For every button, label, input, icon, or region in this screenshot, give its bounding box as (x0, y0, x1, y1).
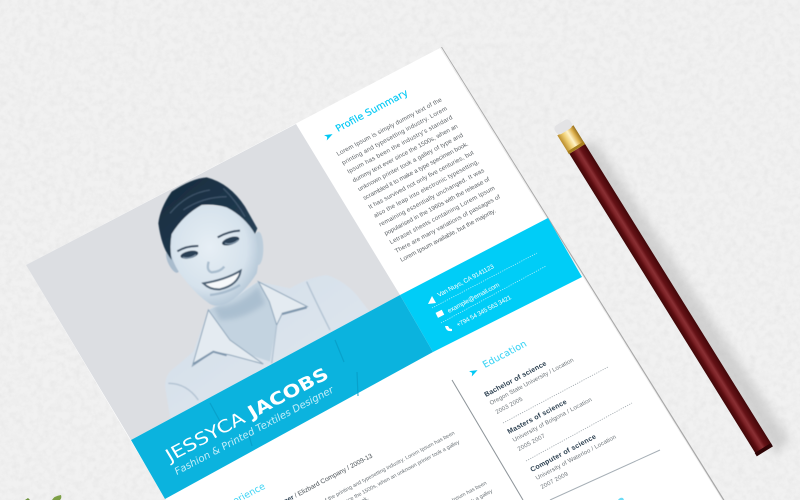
panel: contact details (428, 253, 546, 331)
panel: education (469, 339, 632, 491)
sheet edge shadow (441, 47, 724, 500)
degree 3: Computer of science (529, 434, 598, 474)
panel: profile summary (324, 88, 507, 264)
dotted separator (526, 403, 632, 461)
pencil (553, 118, 790, 456)
summary text: Letraset sheets containing Lorem Ipsum (388, 185, 496, 246)
summary text: remaining essentially unchanged. It was (378, 167, 486, 228)
degree 2: Masters of science (506, 399, 568, 436)
panel: experience (216, 431, 494, 500)
name and job title (161, 365, 337, 478)
degree 3: 2007 2009 (540, 471, 570, 491)
summary text: There are many variations of passages of (394, 194, 502, 255)
summary text: Lorem Ipsum available, but the majority. (399, 208, 498, 264)
divider lines (452, 380, 523, 500)
resume sheet (26, 47, 724, 500)
summary text: also the leap into electronic typesetting, (373, 158, 481, 220)
summary text: It has survived not only five centuries, but (367, 149, 475, 211)
phone: +794 54 345 563 3421 (455, 294, 513, 329)
summary text: scrambled it to make a type specimen book. (362, 141, 470, 202)
hair (158, 177, 257, 260)
address: Van Nuys, CA 9141123 (436, 263, 496, 299)
shirt (166, 276, 368, 418)
degree 1: 2003 2005 (495, 396, 525, 416)
panel: contact band (400, 218, 582, 352)
dotted separators (432, 253, 546, 323)
degree 3: University of Waterloo / Location (535, 435, 618, 482)
degree 1: Oregon State University / Location (489, 358, 575, 407)
leaf fragment (25, 495, 61, 500)
degree 1: Bachelor of science (483, 360, 548, 399)
heading: Profile Summary (334, 88, 411, 135)
shirt seams through band (210, 340, 358, 446)
degree 2: 2005 2007 (517, 433, 547, 453)
summary text: unknown printer took a galley of type and (357, 132, 465, 193)
degree 2: University of Bolgona / Location (512, 397, 593, 444)
icon: location (428, 296, 436, 304)
panel: photo background (26, 124, 400, 440)
smile (203, 271, 241, 289)
far ear (253, 232, 263, 265)
summary text (335, 96, 507, 264)
icon: phone (445, 326, 452, 331)
sheet (26, 48, 722, 500)
job title: Fashion & Printed Textiles Designer (173, 385, 337, 478)
summary text: Ipsum has been the industry's standard (346, 114, 454, 175)
collar (192, 282, 307, 366)
neck (208, 282, 277, 362)
nose (208, 262, 224, 272)
summary text: Lorem Ipsum is simply dummy text of the (335, 96, 444, 158)
name: JESSYCA JACOBS (161, 365, 333, 467)
dotted separator (503, 367, 608, 423)
summary text: popularised in the 1960s with the release of (383, 176, 491, 237)
photo: smiling woman (158, 177, 383, 427)
shirt folds (168, 282, 330, 400)
icon: envelope (436, 310, 444, 318)
summary text: printing and typesetting industry. Lorem (341, 105, 449, 167)
heading: Education (481, 339, 529, 371)
next section heading fragment (618, 498, 624, 500)
eyebrows (177, 231, 240, 251)
icon: paper plane (469, 368, 479, 376)
email: example@email.com (446, 282, 501, 315)
near ear (166, 252, 179, 274)
summary text: dummy text ever since the 1500s, when an (351, 123, 460, 184)
icon: paper plane (324, 132, 334, 140)
panel: name band (131, 295, 433, 499)
face (170, 205, 258, 306)
eyes (180, 250, 199, 260)
